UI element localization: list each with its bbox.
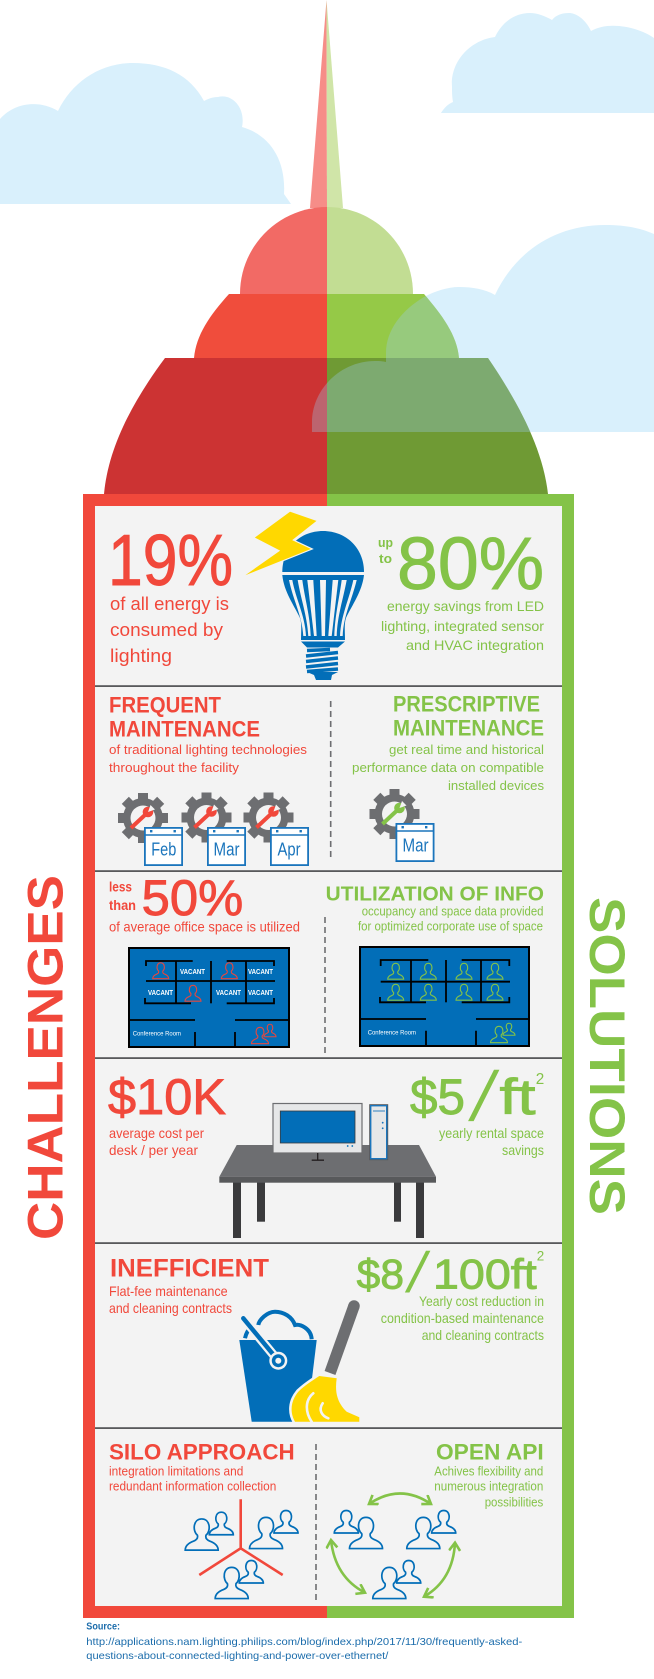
text block: energy consumed: of all energy is — [110, 593, 229, 614]
lower dome tier — [104, 358, 548, 494]
icon: desk with computer — [219, 1104, 436, 1238]
text block: performance data on compatible — [352, 760, 544, 775]
icon: gear and Mar calendar — [370, 789, 434, 861]
floor plan: mostly vacant: VACANT — [180, 967, 205, 976]
heading — [393, 692, 544, 741]
stat: $8/100ft2 — [357, 1242, 544, 1305]
stat: $10K: $10K — [108, 1069, 226, 1125]
text block: Achives flexibility and — [434, 1465, 543, 1479]
text block — [439, 1125, 544, 1158]
text block: energy consumed: lighting — [110, 645, 172, 666]
icon: gear and Mar calendar — [182, 792, 245, 865]
stat: $5/ft2: $5 — [410, 1069, 465, 1125]
text block: redundant information collection — [109, 1480, 276, 1494]
text block: and cleaning contracts — [422, 1327, 544, 1343]
text block: energy savings: energy savings from LED — [387, 598, 544, 614]
panel: maintenance savings — [357, 1242, 544, 1343]
text block: of traditional lighting technologies — [109, 742, 308, 757]
text block — [352, 742, 544, 793]
panel: desk cost challenge — [108, 1069, 226, 1158]
text block: yearly rental space — [439, 1125, 544, 1141]
heading: MAINTENANCE — [109, 717, 260, 742]
label: up to: to — [379, 551, 392, 566]
stat: 50%: 50% — [142, 870, 243, 926]
panel: rental savings — [410, 1059, 544, 1158]
text block: Flat-fee maintenance — [109, 1283, 228, 1299]
text block: energy savings: and HVAC integration — [406, 637, 544, 653]
cloud: upper right — [441, 13, 654, 113]
heading: OPEN API — [436, 1439, 544, 1464]
text block: energy consumed — [110, 593, 229, 666]
label: less than: than — [109, 898, 136, 913]
label: less than: less — [109, 880, 132, 895]
monitor — [273, 1104, 362, 1160]
panel: energy solution — [378, 522, 544, 653]
heading — [109, 693, 260, 742]
stat: 80%: 80% — [397, 522, 544, 605]
source note: Source: — [86, 1620, 120, 1632]
label: up to: up — [378, 535, 393, 550]
icon: gear and Mar calendar: Mar — [402, 836, 429, 856]
icon: gear and Apr calendar — [244, 792, 308, 865]
text block: Yearly cost reduction in — [419, 1293, 544, 1309]
bucket — [239, 1312, 317, 1422]
stat: $5/ft2 — [410, 1059, 544, 1136]
panel: prescriptive maintenance — [352, 692, 544, 861]
middle dome tier — [194, 294, 459, 358]
text block — [358, 905, 544, 934]
text block: for optimized corporate use of space — [358, 920, 543, 934]
source note: questions-about-connected-lighting-and-power-over-ethernet/ — [86, 1650, 388, 1662]
stat: $8/100ft2: $8 — [357, 1250, 404, 1297]
text block — [109, 742, 308, 775]
cloud: lower right — [312, 225, 654, 432]
stat: $8/100ft2: 100ft — [433, 1250, 537, 1297]
heading: SILO APPROACH — [109, 1439, 295, 1464]
text block: throughout the facility — [109, 760, 240, 775]
icon: lightning bolt — [241, 511, 318, 578]
spire — [310, 0, 343, 208]
text block: energy savings — [381, 598, 544, 653]
stat: $5/ft2: 2 — [536, 1071, 544, 1088]
source note — [86, 1620, 523, 1662]
text block: possibilities — [485, 1496, 543, 1510]
text block: energy savings: lighting, integrated sensor — [381, 618, 544, 634]
text block: occupancy and space data provided — [362, 905, 544, 919]
floor plan: mostly vacant: VACANT — [248, 967, 273, 976]
text block: of average office space is utilized — [109, 919, 300, 935]
panel: silo approach — [109, 1439, 298, 1599]
floor plan: fully occupied: Conference Room — [368, 1030, 416, 1037]
diagram: connected groups — [331, 1494, 456, 1599]
heading: INEFFICIENT — [110, 1255, 269, 1283]
text block — [109, 1465, 276, 1494]
text block: numerous integration — [434, 1480, 543, 1494]
heading: FREQUENT — [109, 693, 222, 718]
text block — [109, 1125, 204, 1158]
panel: energy challenge — [108, 521, 233, 666]
main frame — [83, 494, 574, 1618]
stat: $8/100ft2: 2 — [537, 1248, 544, 1264]
text block: energy consumed: consumed by — [110, 619, 224, 640]
icon: gear and Mar calendar: Mar — [214, 840, 240, 860]
text block: average cost per — [109, 1125, 204, 1141]
stat: 19%: 19% — [108, 521, 233, 601]
side heading: challenges: CHALLENGES — [18, 875, 74, 1240]
top dome tier — [240, 207, 413, 294]
heading: PRESCRIPTIVE — [393, 692, 540, 717]
source note: http://applications.nam.lighting.philips.com/blog/index.php/2017/11/30/frequently-asked- — [86, 1636, 523, 1648]
heading: MAINTENANCE — [393, 716, 544, 741]
panel: frequent maintenance — [109, 693, 308, 865]
floor plan: mostly vacant: VACANT — [248, 988, 273, 997]
text block: and cleaning contracts — [109, 1300, 232, 1316]
text block — [381, 1293, 544, 1343]
icon: gear and Apr calendar: Apr — [278, 840, 301, 860]
icon: gear and Feb calendar: Feb — [151, 840, 176, 860]
diagram: separated groups — [185, 1499, 298, 1599]
broom — [292, 1300, 360, 1422]
text block — [109, 1283, 232, 1316]
label: up to — [378, 535, 393, 566]
floor plan: mostly vacant: Conference Room — [133, 1031, 181, 1038]
panel: office space challenge — [109, 870, 300, 1047]
floor plan: mostly vacant: VACANT — [216, 988, 241, 997]
desk — [219, 1145, 436, 1238]
floor plan: mostly vacant: VACANT — [148, 988, 173, 997]
cloud overlap on dome — [312, 296, 530, 432]
text block: integration limitations and — [109, 1465, 243, 1479]
label: less than — [109, 880, 136, 913]
cloud: upper left — [0, 63, 291, 204]
stat: $5/ft2: / — [465, 1059, 502, 1136]
panel: inefficient — [109, 1255, 269, 1316]
text block: desk / per year — [109, 1142, 198, 1158]
computer tower — [369, 1104, 388, 1160]
text block: get real time and historical — [389, 742, 544, 757]
icon: bucket and broom — [239, 1300, 360, 1422]
text block — [434, 1465, 543, 1510]
building dome: red and green tower — [104, 0, 548, 494]
side heading: solutions: SOLUTIONS — [579, 897, 635, 1215]
stat: $5/ft2: ft — [500, 1069, 536, 1125]
heading: UTILIZATION OF INFO — [326, 883, 544, 906]
stat: $8/100ft2: / — [402, 1242, 433, 1305]
panel: open api — [331, 1439, 544, 1599]
icon: gear and Feb calendar — [118, 793, 182, 865]
icon: light bulb — [282, 531, 364, 680]
floor plan: mostly vacant — [129, 948, 289, 1047]
text block: installed devices — [448, 778, 544, 793]
panel: utilization of info — [326, 883, 544, 1046]
floor plan: fully occupied — [360, 947, 529, 1046]
text block: condition-based maintenance — [381, 1310, 544, 1326]
text block: savings — [502, 1142, 544, 1158]
